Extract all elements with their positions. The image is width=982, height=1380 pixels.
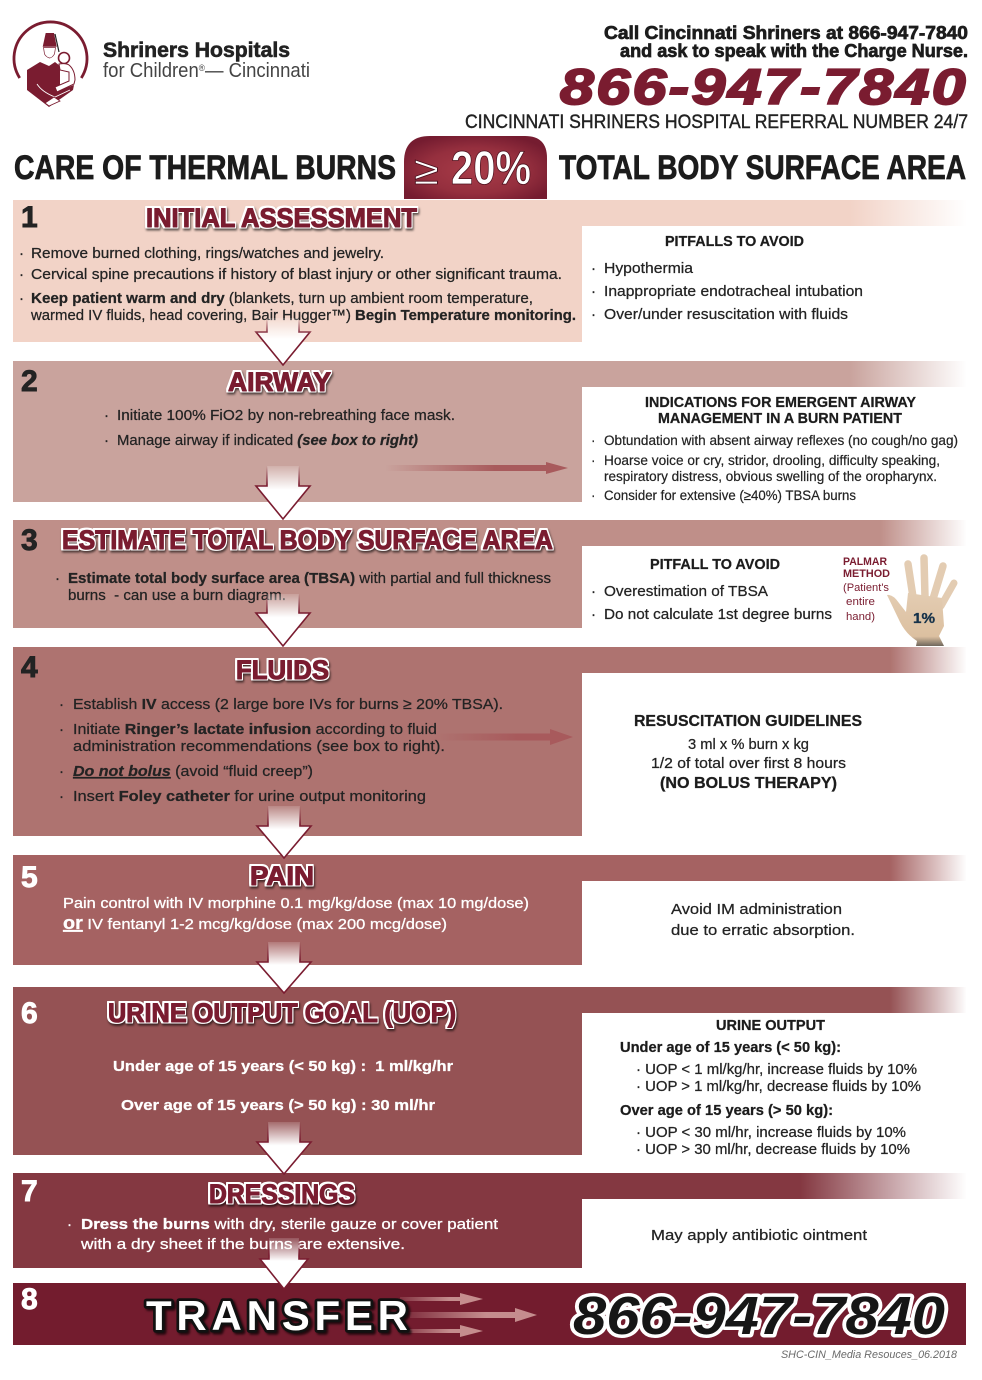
assessment bullets: [19, 245, 576, 324]
step number 8: 8: [21, 1283, 38, 1316]
down arrow 3 to 4: [256, 594, 310, 646]
heading: airway: AIRWAY: [228, 367, 331, 397]
pitfalls column: Over/under resuscitation with fluids: [604, 306, 848, 323]
band 5: [13, 855, 966, 965]
assessment bullets: warmed IV fluids, head covering, Bair Hugger™) Begin Temperature monitoring.: [30, 307, 576, 324]
airway bullets: Initiate 100% FiO2 by non-rebreathing face mask.: [117, 407, 455, 424]
down arrow 4 to 5: [257, 806, 311, 858]
band 4: [13, 647, 966, 836]
down arrow 6 to 7: [257, 1122, 311, 1174]
dressings text: [67, 1216, 499, 1253]
pitfalls column: ·: [591, 260, 596, 277]
urine goals: Under age of 15 years (< 50 kg) : 1 ml/kg/hr: [113, 1058, 453, 1075]
estimate bullet: Estimate total body surface area (TBSA) with partial and full thickness: [68, 570, 551, 587]
emergent airway column: respiratory distress, obvious swelling of the oropharynx.: [604, 469, 937, 484]
estimate bullet: burns - can use a burn diagram.: [68, 587, 286, 604]
assessment bullets: Keep patient warm and dry (blankets, turn up ambient room temperature,: [31, 290, 533, 307]
urine output column: URINE OUTPUT: [716, 1018, 825, 1034]
fluids bullets: Initiate Ringer’s lactate infusion according to fluid: [73, 721, 437, 738]
logo wordmark: [103, 39, 310, 82]
band 6: [13, 987, 966, 1155]
emergent airway column: ·: [591, 433, 596, 448]
icon: shriner carrying child: [14, 22, 87, 107]
down arrow 1 to 2: [256, 318, 310, 365]
band 2: [13, 361, 966, 502]
icon: hand: [887, 558, 954, 646]
dressings note: May apply antibiotic ointment: [651, 1227, 868, 1244]
emergent airway column: MANAGEMENT IN A BURN PATIENT: [658, 411, 902, 427]
panel: 2 airway: [13, 361, 967, 503]
logo wordmark: for Children: [103, 60, 206, 82]
pain text: [63, 895, 529, 933]
panel: 5 pain: [13, 855, 967, 965]
fluids bullets: [59, 696, 503, 805]
logo wordmark: ®: [199, 63, 205, 73]
band 1: [13, 200, 966, 342]
urine output column: Over age of 15 years (> 50 kg):: [620, 1103, 833, 1119]
urine output column: · UOP < 30 ml/hr, increase fluids by 10%: [636, 1124, 906, 1141]
pain note column: [671, 901, 855, 939]
main title left: CARE OF THERMAL BURNS: [14, 149, 396, 187]
assessment bullets: Cervical spine precautions if history of blast injury or other significant trauma.: [31, 266, 562, 283]
band 3: [13, 520, 966, 628]
heading: dressings: DRESSINGS: [209, 1179, 355, 1209]
pitfall column: Overestimation of TBSA: [604, 583, 768, 600]
fluids bullets: Do not bolus (avoid “fluid creep”): [73, 763, 313, 780]
emergent airway column: ·: [591, 453, 596, 468]
panel: 7 dressings: [13, 1173, 967, 1268]
arrow to right box: [385, 462, 568, 474]
palmar method label: entire: [846, 596, 875, 608]
palmar method label: (Patient's: [843, 582, 889, 594]
pitfalls column: Inappropriate endotracheal intubation: [604, 283, 863, 300]
emergent airway column: INDICATIONS FOR EMERGENT AIRWAY: [645, 395, 916, 411]
step number 5: 5: [21, 861, 38, 894]
resuscitation guidelines column: [634, 713, 862, 792]
resuscitation guidelines column: 3 ml x % burn x kg: [688, 736, 809, 753]
estimate bullet: ·: [55, 570, 60, 587]
panel: 6 urine output goal: [13, 987, 967, 1158]
call instructions: [604, 23, 968, 61]
urine output column: · UOP < 1 ml/kg/hr, increase fluids by 10%: [636, 1061, 917, 1078]
pain text: Pain control with IV morphine 0.1 mg/kg/dose (max 10 mg/dose): [63, 895, 529, 912]
resuscitation guidelines column: (NO BOLUS THERAPY): [660, 775, 837, 792]
pain note column: due to erratic absorption.: [671, 922, 855, 939]
urine output column: Under age of 15 years (< 50 kg):: [620, 1040, 841, 1056]
step number 3: 3: [21, 524, 38, 557]
step number 2: 2: [21, 365, 38, 398]
emergent airway column: Hoarse voice or cry, stridor, drooling, difficulty speaking,: [604, 453, 940, 468]
down arrow 5 to 6: [257, 942, 311, 993]
heading: pain: PAIN: [250, 861, 314, 891]
emergent airway column: Consider for extensive (≥40%) TBSA burns: [604, 488, 856, 503]
assessment bullets: Remove burned clothing, rings/watches and jewelry.: [31, 245, 384, 262]
pitfalls column: ·: [591, 306, 596, 323]
palmar method label: [843, 556, 890, 623]
palmar method label: METHOD: [843, 568, 890, 580]
transfer arrows: [400, 1293, 537, 1337]
fluids bullets: ·: [59, 763, 64, 780]
fluids bullets: Establish IV access (2 large bore IVs for burns ≥ 20% TBSA).: [73, 696, 503, 713]
airway bullets: Manage airway if indicated (see box to right): [117, 432, 418, 449]
footer credit: SHC-CIN_Media Resouces_06.2018: [781, 1349, 958, 1361]
urine goals: [113, 1058, 453, 1114]
estimate bullet: [55, 570, 551, 604]
fluids bullets: Insert Foley catheter for urine output monitoring: [73, 788, 426, 805]
resuscitation guidelines column: 1/2 of total over first 8 hours: [651, 755, 846, 772]
pitfall column: [591, 557, 832, 623]
logo wordmark: — Cincinnati: [205, 60, 310, 82]
heading: urine output goal: URINE OUTPUT GOAL (UOP): [108, 998, 456, 1028]
panel: 8 transfer: [13, 1283, 966, 1346]
band 7: [13, 1173, 966, 1268]
heading: fluids: FLUIDS: [236, 655, 329, 685]
pitfall column: ·: [591, 606, 596, 623]
icon: hand: 1%: [913, 610, 935, 627]
step number 6: 6: [21, 997, 38, 1030]
fluids bullets: administration recommendations (see box to right).: [73, 738, 445, 755]
logo: Shriners Hospitals: [14, 22, 310, 107]
pain note column: Avoid IM administration: [671, 901, 842, 918]
assessment bullets: ·: [19, 245, 24, 262]
resuscitation guidelines column: RESUSCITATION GUIDELINES: [634, 713, 862, 730]
palmar method label: PALMAR: [843, 556, 887, 568]
logo wordmark: Shriners Hospitals: [103, 39, 290, 62]
airway bullets: [104, 407, 455, 449]
heading: transfer: TRANSFER: [146, 1292, 408, 1339]
step number 7: 7: [21, 1175, 38, 1208]
emergent airway column: [591, 395, 958, 503]
step number 4: 4: [21, 651, 38, 684]
dressings text: ·: [67, 1216, 72, 1233]
fluids bullets: ·: [59, 721, 64, 738]
pitfall column: PITFALL TO AVOID: [650, 557, 780, 573]
pitfalls column: ·: [591, 283, 596, 300]
airway bullets: ·: [104, 407, 109, 424]
pitfall column: Do not calculate 1st degree burns: [604, 606, 832, 623]
dressings text: with a dry sheet if the burns are extensive.: [80, 1236, 405, 1253]
step number 1: 1: [21, 201, 38, 234]
urine goals: Over age of 15 years (> 50 kg) : 30 ml/hr: [121, 1097, 435, 1114]
pitfalls column: Hypothermia: [604, 260, 694, 277]
badge: 20 percent: ≥: [414, 149, 439, 193]
phone number: 866-947-7840: [573, 1286, 945, 1346]
pitfall column: ·: [591, 583, 596, 600]
urine output column: · UOP > 30 ml/hr, decrease fluids by 10%: [636, 1141, 910, 1158]
heading: estimate total body surface area: ESTIMATE TOTAL BODY SURFACE AREA: [62, 525, 553, 555]
emergent airway column: Obtundation with absent airway reflexes (no cough/no gag): [604, 433, 958, 448]
arrow to right box: [435, 729, 573, 745]
dressings text: Dress the burns with dry, sterile gauze or cover patient: [81, 1216, 499, 1233]
heading: initial assessment: INITIAL ASSESSMENT: [146, 203, 417, 233]
assessment bullets: ·: [19, 266, 24, 283]
assessment bullets: ·: [19, 290, 24, 307]
emergent airway column: ·: [591, 488, 596, 503]
badge: 20 percent: 20%: [451, 141, 531, 194]
down arrow 7 to 8: [260, 1238, 308, 1289]
urine output column: · UOP > 1 ml/kg/hr, decrease fluids by 10%: [636, 1078, 921, 1095]
down arrow 2 to 3: [256, 466, 310, 519]
airway bullets: ·: [104, 432, 109, 449]
fluids bullets: ·: [59, 788, 64, 805]
urine output column: [620, 1018, 921, 1158]
pain text: or IV fentanyl 1-2 mcg/kg/dose (max 200 mcg/dose): [63, 913, 447, 933]
fluids bullets: ·: [59, 696, 64, 713]
panel: 3 estimate TBSA: [13, 520, 967, 646]
call instructions: and ask to speak with the Charge Nurse.: [620, 41, 968, 61]
band 8: [13, 1283, 966, 1345]
palmar method label: hand): [846, 611, 875, 623]
panel: 4 fluids: [13, 647, 967, 836]
large phone number: 866-947-7840: [560, 59, 968, 115]
call instructions: Call Cincinnati Shriners at 866-947-7840: [604, 23, 968, 43]
pitfalls column: PITFALLS TO AVOID: [665, 234, 804, 250]
badge: 20 percent: [404, 136, 547, 199]
pitfalls column: [591, 234, 863, 323]
panel: 1 initial assessment: [13, 200, 967, 342]
